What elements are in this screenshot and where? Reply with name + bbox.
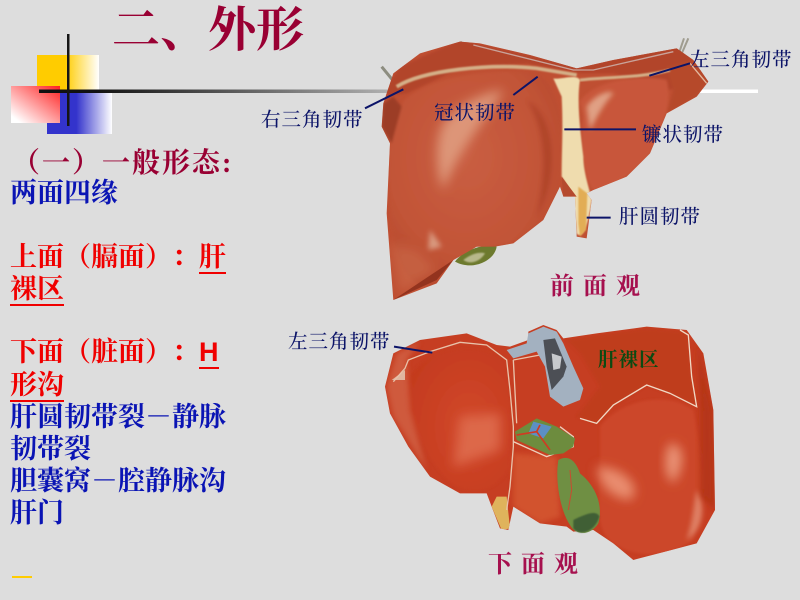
right lobe shading [599, 399, 701, 554]
text: lower surface: H [199, 337, 218, 367]
text: H-shaped groove: 形沟 [10, 370, 64, 400]
text: upper surface: 上面（膈面）： [10, 242, 199, 272]
text: two surfaces four margins: 两面四缘 [10, 178, 118, 208]
caption: anterior view: 前面观 [550, 274, 649, 300]
text: upper surface: 肝 [199, 242, 226, 272]
label: coronary ligament: 冠状韧带 [434, 103, 516, 124]
title: 二、外形 [112, 4, 304, 57]
porta hepatis vessels [515, 418, 575, 455]
leader: round ligament [587, 215, 611, 221]
left lobe [580, 78, 668, 190]
falciform ligament [553, 77, 592, 235]
label: round ligament: 肝圆韧带 [619, 207, 701, 228]
round ligament [492, 497, 510, 530]
illustration: liver anterior view [364, 38, 708, 300]
right lobe [389, 72, 562, 285]
top cuff [380, 40, 713, 97]
left lobe shading [446, 402, 488, 440]
text: porta hepatis: 肝门 [10, 498, 64, 528]
yellow dash [12, 576, 32, 578]
label: bare area: 肝裸区 [598, 350, 660, 371]
text: lower surface: 下面（脏面）： [10, 337, 199, 367]
gallbladder tip [455, 246, 497, 265]
text block: description list [10, 178, 226, 528]
label: falciform ligament: 镰状韧带 [642, 125, 724, 146]
caption: inferior view: 下面观 [488, 552, 587, 578]
text: bare area: 裸区 [10, 274, 64, 304]
text: round ligament fissure line one: 肝圆韧带裂－静脉 [10, 402, 226, 432]
white peritoneal lines [393, 342, 513, 510]
text: round ligament fissure line two: 韧带裂 [10, 434, 91, 464]
label: left triangular ligament (anterior): 左三角韧带 [690, 50, 793, 71]
inferior vena cava [507, 327, 583, 407]
leader: right triangular ligament [365, 89, 403, 108]
label: right triangular ligament: 右三角韧带 [261, 110, 364, 131]
bare area [573, 330, 694, 422]
gallbladder [557, 458, 600, 533]
text: upper surface [10, 242, 670, 456]
label: left triangular ligament (inferior): 左三角韧带 [288, 332, 391, 353]
illustration: liver inferior view [385, 325, 715, 560]
leader: falciform ligament [564, 126, 636, 132]
subheading: general form: （一）一般形态: [12, 148, 233, 179]
leader: coronary ligament [513, 77, 538, 95]
pins [382, 67, 397, 85]
leader: left triangular ligament [394, 347, 432, 353]
leader: left triangular ligament [649, 63, 690, 76]
text: gallbladder fossa: 胆囊窝－腔静脉沟 [10, 466, 226, 496]
